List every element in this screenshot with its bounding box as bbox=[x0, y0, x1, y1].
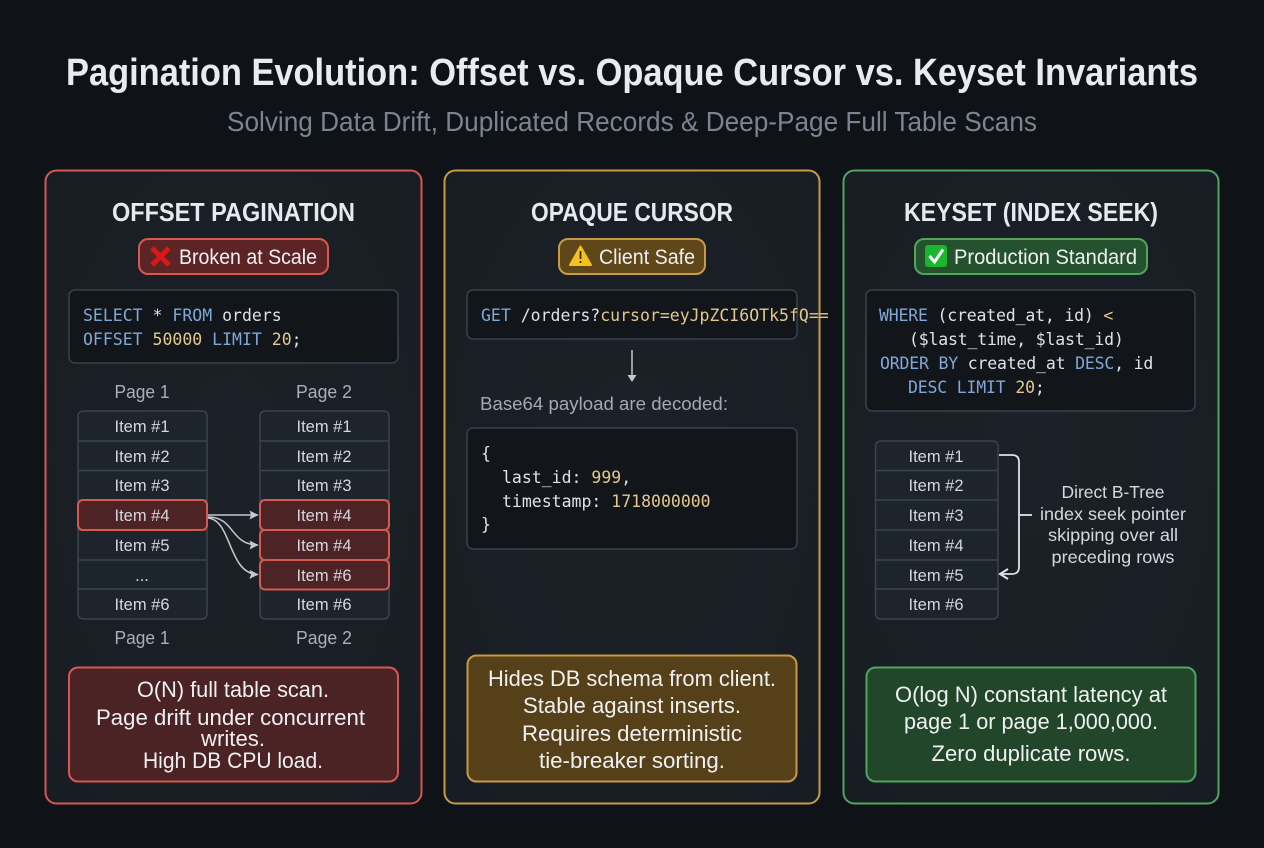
table: page 1 rows: Item #5 bbox=[114, 537, 170, 555]
code block: decoded payload: last_id: 999, bbox=[502, 468, 631, 487]
code block: decoded payload bbox=[467, 428, 797, 549]
callout: offset drawbacks: High DB CPU load. bbox=[143, 748, 323, 773]
callout: keyset benefits: Zero duplicate rows. bbox=[932, 741, 1130, 766]
subtitle: Solving Data Drift, Duplicated Records & Deep-Page Full Table Scans bbox=[227, 106, 1037, 137]
callout: cursor properties bbox=[468, 656, 796, 782]
arrow: decode step bbox=[628, 350, 636, 382]
table: page 1 rows: Item #3 bbox=[114, 477, 170, 495]
badge: broken at scale bbox=[139, 239, 328, 274]
table: page 1 rows bbox=[78, 411, 207, 619]
table: page 2 rows: Item #4 bbox=[296, 507, 352, 525]
text: index seek note: index seek pointer bbox=[1040, 504, 1186, 524]
panel: opaque cursor bbox=[444, 170, 829, 804]
code block: decoded payload: timestamp: 1718000000 bbox=[502, 492, 711, 511]
badge label: Broken at Scale bbox=[179, 246, 317, 269]
callout: offset drawbacks: writes. bbox=[200, 726, 265, 751]
callout: offset drawbacks bbox=[69, 668, 398, 782]
heading: offset pagination: OFFSET PAGINATION bbox=[112, 197, 355, 227]
table: page 1 rows: Item #2 bbox=[114, 448, 170, 466]
arrows: page 1 item to page 2 items bbox=[208, 515, 258, 574]
code block: decoded payload: } bbox=[481, 515, 491, 534]
code block: decoded payload: { bbox=[481, 444, 491, 463]
code block: cursor request: GET /orders?cursor=eyJpZCI6OTk5fQ== bbox=[481, 306, 829, 325]
callout: offset drawbacks: Page drift under concurrent bbox=[96, 705, 365, 730]
table: page 2 rows: Item #4 bbox=[296, 537, 352, 555]
panel: keyset bbox=[844, 170, 1218, 804]
label: page 2 top: Page 2 bbox=[296, 382, 352, 402]
table: keyset rows: Item #1 bbox=[908, 448, 964, 466]
table: page 1 rows: ... bbox=[135, 567, 149, 585]
heading: opaque cursor: OPAQUE CURSOR bbox=[531, 197, 733, 227]
text: index seek note: preceding rows bbox=[1052, 547, 1175, 567]
table: page 2 rows: Item #2 bbox=[296, 448, 352, 466]
callout: keyset benefits: page 1 or page 1,000,000. bbox=[904, 709, 1158, 734]
table: page 2 rows: Item #6 bbox=[296, 596, 352, 614]
table: page 2 rows: Item #6 bbox=[296, 567, 352, 585]
panel: offset pagination bbox=[46, 170, 422, 804]
table: page 1 rows: Item #6 bbox=[114, 596, 170, 614]
code block: keyset query: WHERE (created_at, id) < bbox=[879, 306, 1113, 325]
label: page 2 bottom: Page 2 bbox=[296, 628, 352, 648]
code block: keyset query: ($last_time, $last_id) bbox=[909, 330, 1124, 349]
text: base64 label: Base64 payload are decoded: bbox=[480, 394, 728, 414]
table: page 2 rows: Item #1 bbox=[296, 418, 352, 436]
table: page 2 rows: Item #3 bbox=[296, 477, 352, 495]
callout: offset drawbacks: O(N) full table scan. bbox=[137, 677, 329, 702]
code block: keyset query: DESC LIMIT 20; bbox=[908, 378, 1045, 397]
code block: cursor request bbox=[467, 290, 829, 339]
badge label: Production Standard bbox=[954, 246, 1137, 269]
code block: keyset query bbox=[866, 290, 1195, 411]
label: page 1 bottom: Page 1 bbox=[114, 628, 170, 648]
table: keyset rows: Item #5 bbox=[908, 567, 964, 585]
badge label: Client Safe bbox=[599, 246, 695, 269]
text: index seek note: skipping over all bbox=[1048, 525, 1178, 545]
callout: cursor properties: Requires deterministic bbox=[522, 721, 742, 746]
code block: offset query bbox=[69, 290, 398, 363]
text: index seek note: Direct B-Tree bbox=[1062, 482, 1164, 502]
code block: keyset query: ORDER BY created_at DESC, id bbox=[880, 354, 1153, 373]
table: keyset rows: Item #4 bbox=[908, 537, 964, 555]
icon: green check bbox=[925, 245, 947, 267]
table: keyset rows bbox=[876, 441, 998, 619]
callout: keyset benefits: O(log N) constant latency at bbox=[895, 682, 1167, 707]
icon: red cross bbox=[152, 248, 169, 265]
badge: production standard bbox=[915, 239, 1147, 274]
code block: offset query: SELECT * FROM orders bbox=[83, 306, 282, 325]
table: keyset rows: Item #3 bbox=[908, 507, 964, 525]
callout: cursor properties: Stable against inserts. bbox=[523, 693, 741, 718]
text: index seek note bbox=[1040, 482, 1186, 567]
callout: cursor properties: tie-breaker sorting. bbox=[539, 748, 725, 773]
label: page 1 top: Page 1 bbox=[114, 382, 170, 402]
badge: client safe bbox=[559, 239, 705, 274]
callout: keyset benefits bbox=[866, 668, 1196, 782]
icon: warning triangle bbox=[570, 246, 591, 265]
arrow: index seek bracket bbox=[999, 455, 1032, 579]
table: page 2 rows bbox=[260, 411, 389, 619]
table: page 1 rows: Item #1 bbox=[114, 418, 170, 436]
table: keyset rows: Item #6 bbox=[908, 596, 964, 614]
callout: cursor properties: Hides DB schema from client. bbox=[488, 666, 776, 691]
table: keyset rows: Item #2 bbox=[908, 477, 964, 495]
table: page 1 rows: Item #4 bbox=[114, 507, 170, 525]
code block: offset query: OFFSET 50000 LIMIT 20; bbox=[83, 330, 302, 349]
heading: keyset: KEYSET (INDEX SEEK) bbox=[904, 197, 1158, 227]
